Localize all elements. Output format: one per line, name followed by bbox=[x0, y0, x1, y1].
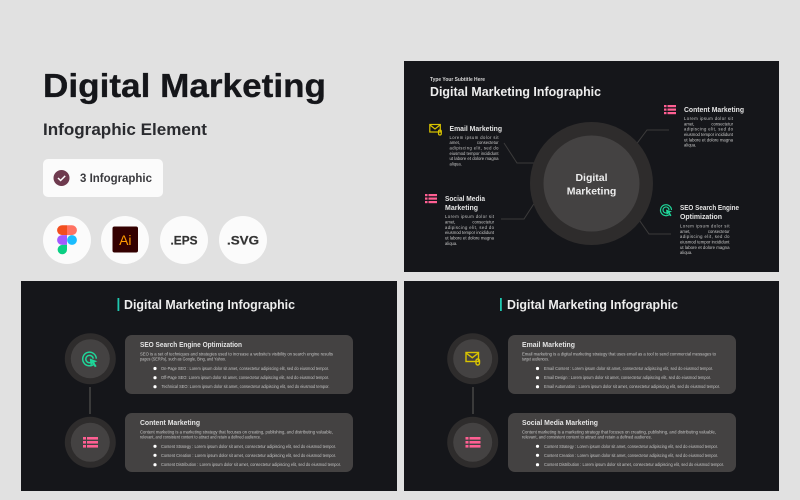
item: social media marketing: Marketing bbox=[445, 205, 478, 212]
item: social media marketing: ut labore et dolore magna bbox=[445, 236, 495, 240]
card: email marketing: Email Content : Lorem ipsum dolor sit amet, consectetur adipiscing elit, sed do eiusmod tempor. bbox=[544, 366, 713, 371]
panel heading: Digital Marketing Infographic bbox=[124, 297, 295, 312]
item: social media marketing: aliqua. bbox=[445, 241, 457, 246]
item: content marketing: consectetur bbox=[711, 121, 734, 126]
badge: SVG bbox=[219, 216, 267, 264]
card: content marketing bbox=[125, 413, 353, 472]
panel: seo and content bbox=[21, 281, 397, 491]
connector bbox=[89, 387, 91, 414]
icon: figma bbox=[43, 216, 91, 264]
item: content marketing bbox=[664, 105, 744, 148]
item: content marketing: adipiscing elit, sed do bbox=[684, 127, 734, 132]
item: seo search engine optimization: amet, bbox=[680, 229, 690, 234]
icon: list bbox=[664, 105, 676, 114]
central circle: Marketing bbox=[567, 186, 616, 198]
item: seo search engine optimization: ut labore et dolore magna bbox=[680, 245, 730, 250]
main title: Digital Marketing bbox=[43, 67, 326, 104]
card: content marketing: Content Creation : Lorem ipsum dolor sit amet, consectetur adipiscing elit, sed do eiusmod tempor. bbox=[161, 453, 336, 458]
card: content marketing: relevant, and consistent content to attract and retain a defined audience. bbox=[140, 434, 261, 440]
card: seo search engine optimization: Off-Page SEO: Lorem ipsum dolor sit amet, consectetur adipiscing elit, sed do eiusmod tempor. bbox=[161, 375, 329, 380]
heading accent bar bbox=[500, 298, 502, 311]
card: email marketing bbox=[508, 335, 736, 394]
icon: adobe illustrator: Ai bbox=[119, 232, 132, 248]
item: seo search engine optimization: eiusmod tempor incididunt bbox=[680, 240, 730, 244]
card: seo search engine optimization: SEO is a set of techniques and strategies used to increase a website's visibility on search engine results bbox=[140, 352, 333, 357]
item: email marketing: consectetur bbox=[477, 140, 499, 145]
item: email marketing: Email Marketing bbox=[450, 126, 502, 133]
card: content marketing: Content Distribution : Lorem ipsum dolor sit amet, consectetur adipiscing elit, sed do eiusmod tempor. bbox=[161, 462, 341, 467]
item: social media marketing: Lorem ipsum dolor sit bbox=[445, 214, 495, 219]
panel: circular overview bbox=[404, 61, 779, 272]
card: social media marketing: Social Media Marketing bbox=[522, 420, 598, 427]
icon: target bbox=[661, 205, 672, 216]
badge: 3 infographic: 3 Infographic bbox=[80, 173, 153, 185]
card: content marketing: Content Marketing bbox=[140, 420, 200, 427]
item: content marketing: aliqua. bbox=[684, 142, 696, 148]
card: email marketing: target audiences. bbox=[522, 357, 549, 362]
item: email marketing: ut labore et dolore magna bbox=[450, 156, 499, 161]
card: content marketing: Content marketing is a marketing strategy that focuses on creating, publishing, and distributing valuable, bbox=[140, 430, 333, 434]
item: seo search engine optimization: Optimization bbox=[680, 214, 722, 221]
card: email marketing: Email Automation : Lorem ipsum dolor sit amet, consectetur adipiscing elit, sed do eiusmod tempor. bbox=[544, 384, 720, 389]
item: seo search engine optimization: adipiscing elit, sed do bbox=[680, 234, 730, 239]
item: seo search engine optimization bbox=[661, 205, 739, 255]
item: email marketing: adipiscing elit, sed do bbox=[450, 146, 499, 150]
node: email bbox=[447, 333, 498, 384]
card: content marketing: Content Strategy : Lorem ipsum dolor sit amet, consectetur adipiscing elit, sed do eiusmod tempor. bbox=[161, 444, 336, 449]
connector bbox=[472, 387, 474, 414]
item: content marketing: amet, bbox=[684, 121, 694, 126]
card: seo search engine optimization: On-Page SEO : Lorem ipsum dolor sit amet, consectetur adipiscing elit, sed do eiusmod tempor. bbox=[161, 366, 329, 371]
item: content marketing: Content Marketing bbox=[684, 107, 744, 114]
card: seo search engine optimization: SEO Search Engine Optimization bbox=[140, 342, 242, 349]
panel heading: Digital Marketing Infographic bbox=[507, 297, 678, 312]
node: content bbox=[65, 417, 116, 468]
card: social media marketing bbox=[508, 413, 736, 472]
subtitle: Infographic Element bbox=[43, 120, 207, 139]
item: seo search engine optimization: SEO Search Engine bbox=[680, 205, 739, 212]
central circle bbox=[530, 122, 653, 245]
item: seo search engine optimization: consectetur bbox=[708, 229, 730, 234]
badge: 3 infographic bbox=[43, 159, 163, 197]
card: email marketing: Email marketing is a digital marketing strategy that uses email as a tool to send commercial messages to bbox=[522, 352, 717, 357]
panel heading: Digital Marketing Infographic bbox=[430, 84, 601, 99]
item: social media marketing: consectetur bbox=[472, 220, 495, 224]
badge: SVG: .SVG bbox=[227, 236, 259, 248]
card: email marketing: Email Marketing bbox=[522, 342, 575, 349]
item: seo search engine optimization: Lorem ipsum dolor sit bbox=[680, 224, 730, 228]
card: social media marketing: Content Distribution : Lorem ipsum dolor sit amet, consectetur adipiscing elit, sed do eiusmod tempor. bbox=[544, 462, 724, 467]
item: social media marketing bbox=[425, 194, 495, 246]
item: social media marketing: Social Media bbox=[445, 196, 485, 203]
panel subtitle: Type Your Subtitle Here bbox=[430, 77, 485, 83]
item: email marketing: amet, bbox=[450, 140, 460, 145]
heading accent bar bbox=[118, 298, 119, 311]
item: content marketing: ut labore et dolore magna bbox=[684, 137, 734, 142]
panel: email and social bbox=[404, 281, 779, 491]
item: email marketing: Lorem ipsum dolor sit bbox=[450, 135, 499, 140]
card: social media marketing: relevant, and consistent content to attract and retain a defined audience. bbox=[522, 434, 652, 440]
connector lines bbox=[501, 130, 671, 234]
item: email marketing bbox=[430, 124, 502, 166]
item: email marketing: aliqua. bbox=[450, 162, 462, 166]
item: social media marketing: adipiscing elit, sed do bbox=[445, 225, 495, 230]
card: seo search engine optimization: Technical SEO: Lorem ipsum dolor sit amet, consectetur adipiscing elit, sed do eiusmod tempor. bbox=[162, 384, 330, 389]
icon: adobe illustrator bbox=[101, 216, 149, 264]
card: social media marketing: Content marketing is a marketing strategy that focuses on creating, publishing, and distributing valuable, bbox=[522, 430, 716, 434]
card: email marketing: Email Design : Lorem ipsum dolor sit amet, consectetur adipiscing elit, sed do eiusmod tempor. bbox=[544, 375, 711, 380]
node: social media bbox=[447, 417, 498, 468]
icon: list bbox=[425, 194, 437, 203]
item: social media marketing: amet, bbox=[445, 220, 455, 224]
card: seo search engine optimization: pages (SERPs), such as Google, Bing, and Yahoo. bbox=[140, 357, 226, 362]
card: seo search engine optimization bbox=[125, 335, 353, 394]
badge: EPS: .EPS bbox=[170, 236, 198, 248]
item: social media marketing: eiusmod tempor incididunt bbox=[445, 230, 495, 235]
icon: email bbox=[430, 124, 441, 135]
central circle: Digital bbox=[575, 172, 608, 184]
item: content marketing: Lorem ipsum dolor sit bbox=[684, 116, 734, 121]
card: social media marketing: Content Strategy : Lorem ipsum dolor sit amet, consectetur adipiscing elit, sed do eiusmod tempor. bbox=[544, 444, 718, 449]
card: social media marketing: Content Creation : Lorem ipsum dolor sit amet, consectetur adipiscing elit, sed do eiusmod tempor. bbox=[544, 453, 718, 458]
node: seo bbox=[65, 333, 116, 384]
item: seo search engine optimization: aliqua. bbox=[680, 250, 692, 255]
badge: EPS bbox=[160, 216, 208, 264]
item: email marketing: eiusmod tempor incididunt bbox=[450, 151, 499, 156]
item: content marketing: eiusmod tempor incididunt bbox=[684, 132, 734, 137]
